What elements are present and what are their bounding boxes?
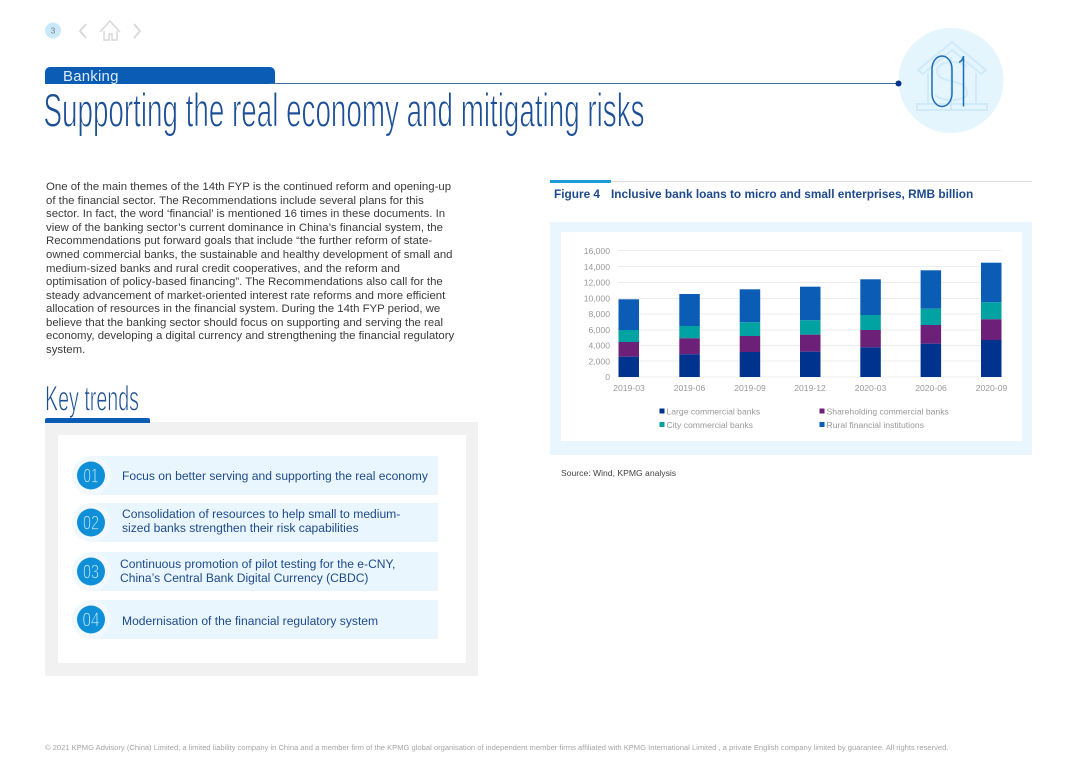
body paragraph: One of the main themes of the 14th FYP is the continued reform and opening-up [46,181,451,193]
y axis labels: 0 [605,372,610,382]
source note: Source: Wind, KPMG analysis [561,468,676,478]
page navigation [45,20,141,41]
x axis labels: 2019-03 [613,383,645,393]
trend 3: Continuous promotion of pilot testing for the e-CNY, [120,557,395,571]
x axis labels: 2020-03 [855,383,886,393]
body paragraph: view of the banking sector’s current dominance in China’s financial system, the [46,222,443,234]
footer: © 2021 KPMG Advisory (China) Limited, a limited liability company in China and a member firm of the KPMG global organisation of independent member firms affiliated with KPMG International Limited , a private English company limited by guarantee. All rights reserved. [45,743,948,752]
stacked bars [618,263,1002,377]
body paragraph: of the financial sector. The Recommendations include several plans for this [46,195,424,207]
trend 3: China’s Central Bank Digital Currency (CBDC) [120,571,368,585]
body paragraph: economy, developing a digital currency and strengthening the financial regulatory [46,330,454,342]
trend 2: sized banks strengthen their risk capabilities [122,521,359,535]
y axis labels: 4,000 [588,340,610,350]
trend 1: Focus on better serving and supporting the real economy [122,469,428,483]
y axis labels: 6,000 [588,325,610,335]
y axis labels: 10,000 [584,293,610,303]
trend 4: Modernisation of the financial regulatory system [122,614,378,628]
legend [660,406,949,430]
icon: forward arrow [134,24,140,38]
y axis labels: 8,000 [588,309,610,319]
body paragraph: allocation of resources in the financial system. During the 14th FYP period, we [46,303,440,315]
trend 4: 04 [82,610,100,632]
trend row backgrounds and text [72,456,438,639]
section badge: 01 with house icon [898,28,1004,133]
figure title: Figure 4 Inclusive bank loans to micro and small enterprises, RMB billion [554,186,973,200]
icon: house with currency sign [917,42,987,110]
y axis labels: 14,000 [584,262,610,272]
body paragraph: medium-sized banks and rural credit cooperatives, and the reform and [46,262,400,274]
x axis labels [613,383,1007,393]
trend 1 [72,456,438,495]
trend 1: 01 [84,466,98,488]
trend 3: 03 [83,562,99,584]
trend 2 [72,503,438,542]
icon: back arrow [80,24,86,38]
icon: home [100,21,120,40]
body paragraph: sector. In fact, the word ‘financial’ is mentioned 16 times in these documents. In [46,208,445,220]
panel accent bar [45,418,150,423]
header rule with end dot [270,80,902,86]
body paragraph: owned commercial banks, the sustainable and healthy development of small and [46,249,453,261]
x axis labels: 2020-06 [915,383,947,393]
y axis labels: 2,000 [588,356,610,366]
body paragraph [46,181,454,356]
trend 3 [72,552,438,591]
body paragraph: believe that the banking sector should focus on supporting and serving the real [46,317,443,329]
y axis labels: 16,000 [584,246,610,256]
body paragraph: system. [46,344,85,356]
section tab: Banking [44,67,274,84]
body paragraph: Recommendations put forward goals that include “the further reform of state- [46,235,432,247]
legend: Shareholding commercial banks [826,406,949,416]
x axis labels: 2020-09 [976,383,1007,393]
legend: Large commercial banks [666,406,760,416]
number: 01 [932,56,964,106]
y axis labels [584,246,610,382]
panel inner white card [58,435,466,663]
x axis labels: 2019-09 [734,383,766,393]
body paragraph: optimisation of policy-based financing”. The Recommendations also call for the [46,276,443,288]
trend 2: Consolidation of resources to help small to medium- [122,507,400,521]
trend 4 [72,600,438,639]
key trends panel [45,422,478,676]
y axis labels: 12,000 [584,278,610,288]
chart panel [550,222,1032,455]
legend: City commercial banks [666,420,753,430]
legend: Rural financial institutions [826,420,924,430]
x axis labels: 2019-12 [794,383,826,393]
figure heading rule [550,180,1032,183]
x axis labels: 2019-06 [674,383,705,393]
body paragraph: steady advancement of market-oriented interest rate reforms and more efficient [46,290,445,302]
page number badge: 3 [51,26,56,36]
trend 2: 02 [83,512,99,534]
